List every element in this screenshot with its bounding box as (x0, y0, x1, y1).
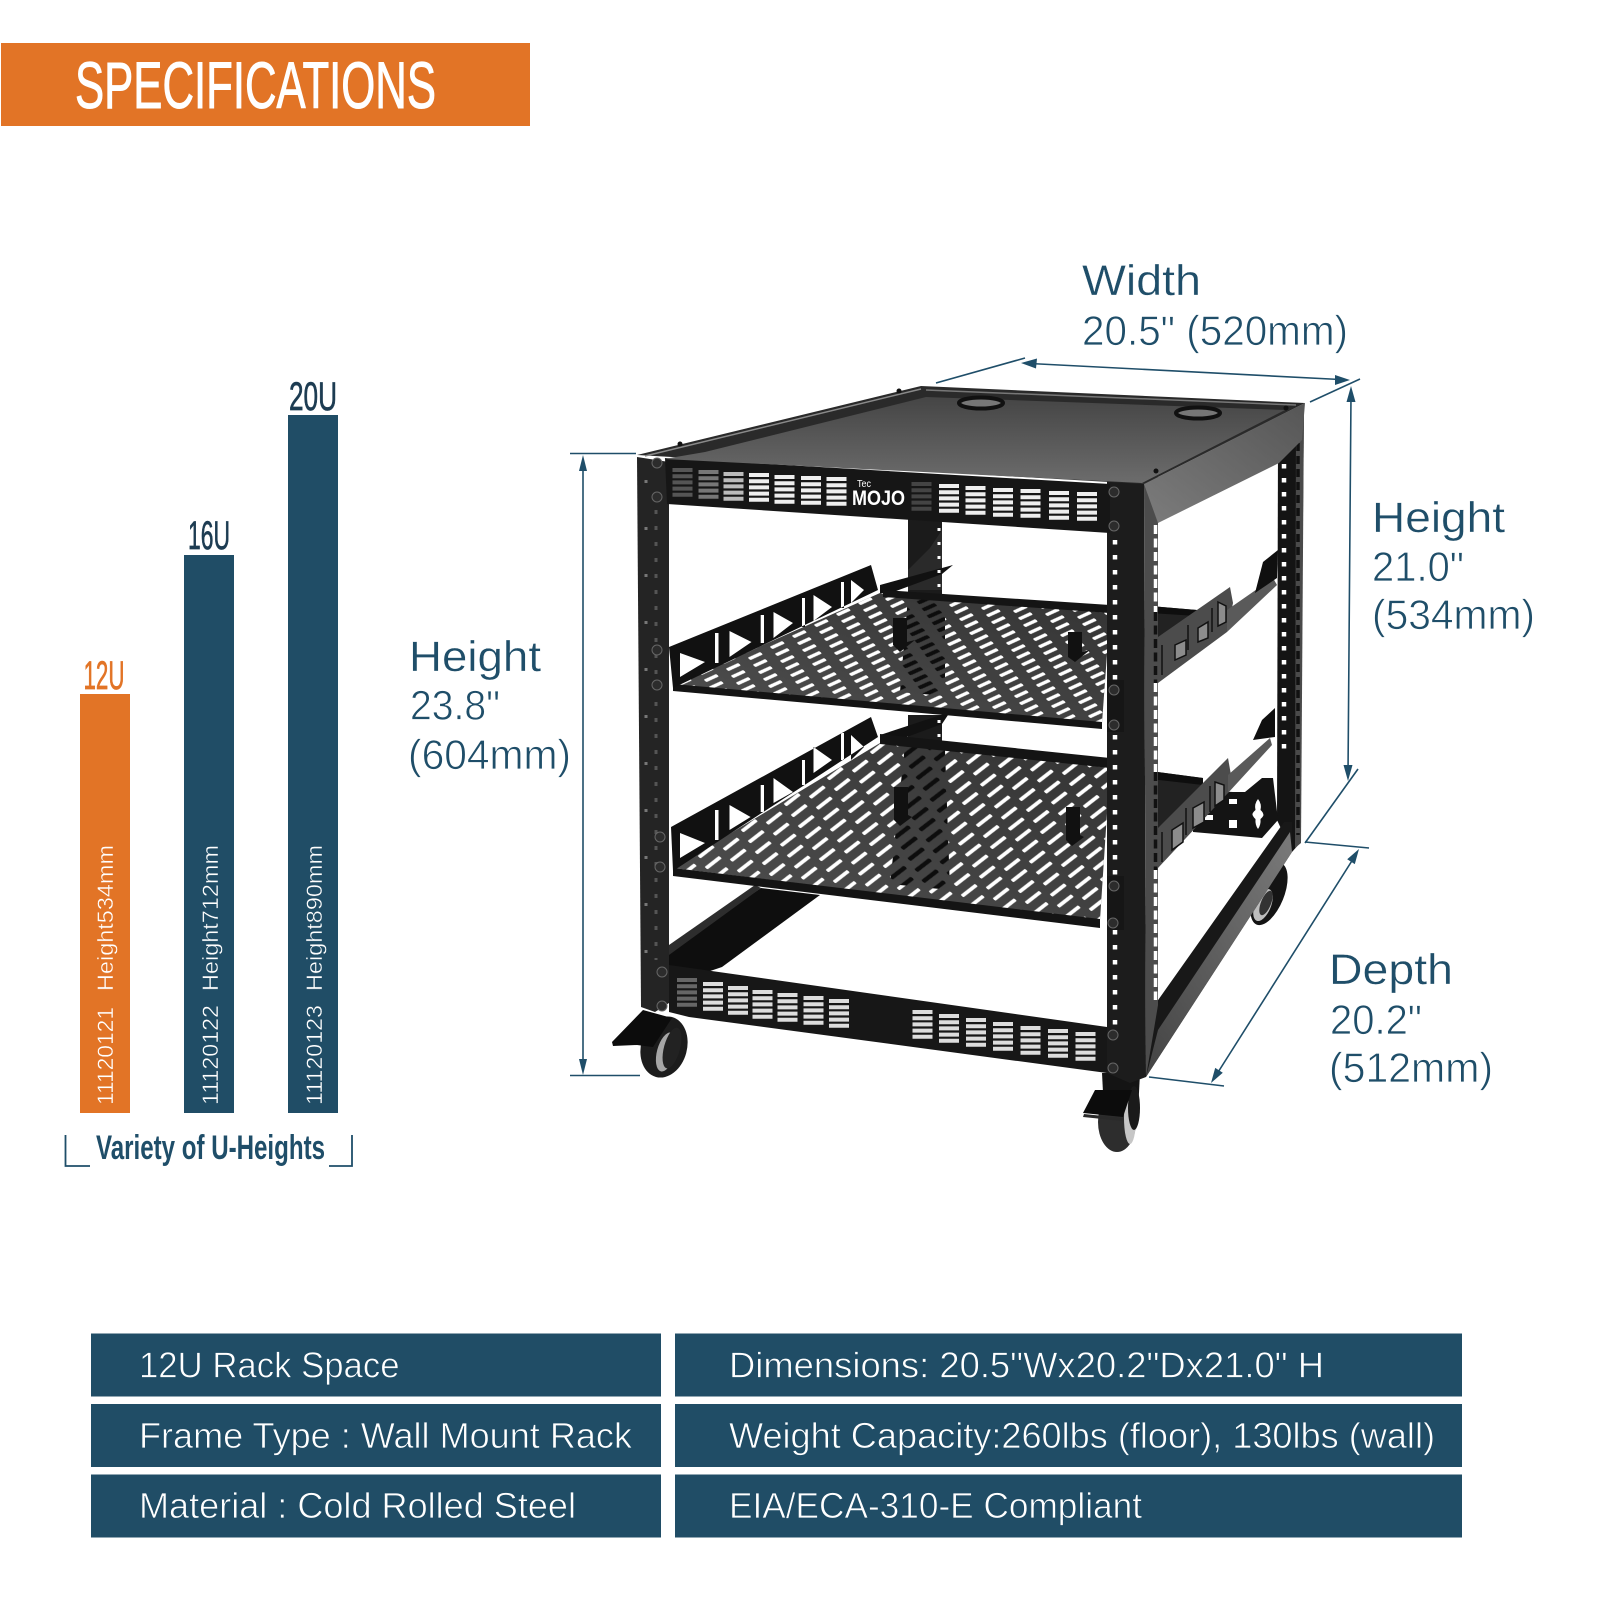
product photo: rack (612, 386, 1305, 1152)
row: material (91, 1474, 661, 1538)
row: frame type (91, 1404, 661, 1467)
brand logo (852, 479, 905, 510)
row: material: Material : Cold Rolled Steel (139, 1485, 576, 1526)
specification table (91, 1334, 1462, 1538)
bar: 16U (184, 514, 234, 1113)
width label: Width (1082, 257, 1201, 305)
front left caster (612, 1010, 694, 1083)
row: weight capacity (675, 1404, 1462, 1467)
front right caster (1083, 1073, 1140, 1152)
title text: SPECIFICATIONS (75, 48, 436, 122)
shelf 2 (671, 717, 1110, 928)
bar: 20U (288, 375, 338, 1113)
bar: 12U: 11120121 (93, 1007, 118, 1105)
right wing shelf 2 (1158, 758, 1231, 868)
shelf 2 right side section (1150, 708, 1275, 868)
width value: 20.5" (520mm) (1082, 307, 1348, 354)
rail shelf 1 (1227, 578, 1277, 632)
arrow: left height (570, 454, 640, 1076)
top plate (637, 386, 1305, 484)
row: rack space (91, 1334, 661, 1396)
bar: 12U (80, 654, 130, 1113)
chart caption with brackets: Variety of U-Heights (96, 1129, 325, 1167)
bottom left side rail (669, 885, 820, 985)
row: dimensions: Dimensions: 20.5"Wx20.2"Dx21.0" H (729, 1344, 1324, 1386)
row: frame type: Frame Type : Wall Mount Rack (139, 1415, 633, 1456)
bar: 16U: Height712mm (198, 845, 223, 991)
back right caster (1243, 858, 1295, 930)
bar: 20U: 11120123 (302, 1005, 327, 1105)
top front beam (665, 458, 1110, 533)
arrow: depth (1149, 842, 1369, 1086)
arrow: width (936, 358, 1360, 402)
back right post (1277, 405, 1304, 852)
mounting screws (652, 458, 1119, 1073)
brand logo: MOJO (852, 487, 905, 510)
bracket shelf 1 (1255, 550, 1278, 593)
dimension: left height: (604mm) (408, 731, 571, 778)
row: compliance: EIA/ECA-310-E Compliant (729, 1485, 1142, 1526)
cable grommets (959, 398, 1003, 408)
bar: 16U: 16U (188, 514, 230, 558)
right wing shelf 1 (1158, 587, 1233, 683)
left wing with cut-outs (669, 565, 878, 688)
left wing with cut-outs (671, 717, 878, 871)
left height values: 23.8" (410, 682, 500, 728)
bar: 20U: 20U (289, 375, 337, 419)
dimension: depth: (512mm) (1329, 1044, 1493, 1091)
bar chart: U-height variants (66, 375, 352, 1167)
right height values: 21.0" (1372, 543, 1464, 590)
dimension: right height: (534mm) (1372, 591, 1535, 638)
right height label: Height (1372, 494, 1505, 542)
back lower bracket plate with keyhole (1193, 778, 1278, 838)
bar: 12U: 12U (84, 654, 124, 698)
title banner (1, 43, 530, 126)
depth values: 20.2" (1330, 996, 1422, 1043)
bottom vents (687, 978, 1086, 1062)
shelf 1 (669, 565, 1110, 729)
front left post (637, 457, 669, 1012)
brand logo: Tec (857, 479, 871, 490)
dimension: width (936, 257, 1360, 402)
rail shelf 2 (1228, 738, 1272, 793)
dimension: left height (408, 454, 640, 1076)
top right side beam (1144, 403, 1305, 523)
shelf 2 clips (894, 787, 1084, 846)
arrow: right height (1305, 386, 1358, 843)
row: weight capacity: Weight Capacity:260lbs (floor), 130lbs (wall) (729, 1415, 1435, 1456)
row: compliance (675, 1474, 1462, 1538)
shelf 1 right side section (1150, 550, 1278, 683)
row: rack space: 12U Rack Space (139, 1344, 400, 1386)
bar: 20U: Height890mm (302, 845, 327, 991)
dimension: right height (1305, 386, 1535, 843)
front right post (1107, 470, 1158, 1083)
top vents (682, 468, 1087, 522)
depth label: Depth (1329, 946, 1453, 994)
left height label: Height (409, 633, 541, 681)
right side bottom rail (1146, 822, 1292, 1077)
row: dimensions (675, 1334, 1462, 1396)
shelf 1 clips (893, 618, 1090, 662)
back left post (880, 510, 953, 760)
bar: 12U: Height534mm (93, 845, 118, 991)
bottom front beam (669, 965, 1107, 1073)
dimension: depth (1149, 842, 1493, 1091)
bracket shelf 2 (1253, 708, 1275, 740)
bar: 16U: 11120122 (198, 1005, 223, 1105)
